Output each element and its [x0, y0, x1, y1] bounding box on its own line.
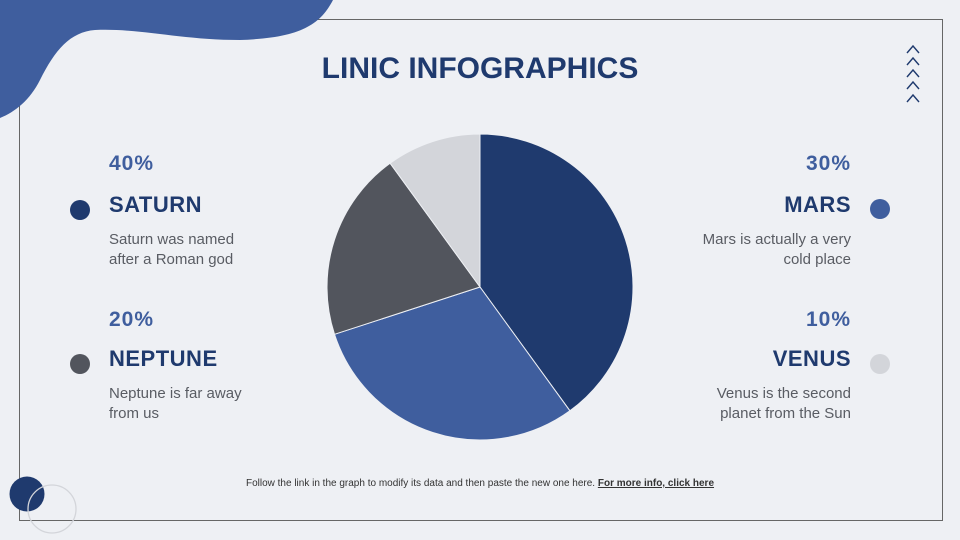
panel: neptune: NEPTUNE [109, 346, 218, 371]
panel: neptune: Neptune is far away from us [109, 385, 242, 422]
panel: venus: Venus is the second planet from the Sun [717, 385, 851, 422]
panel: neptune [70, 308, 242, 422]
icon: chevrons [906, 45, 920, 102]
panel: venus: VENUS [773, 346, 851, 371]
panel: saturn: SATURN [109, 192, 202, 217]
blob top-left [0, 0, 333, 118]
panel: venus: 10% [806, 308, 851, 331]
panel: saturn: 40% [109, 152, 154, 175]
footer note: Follow the link in the graph to modify its data and then paste the new one here. For more info, click here [246, 478, 714, 489]
panel: mars [703, 152, 890, 268]
panel: venus [716, 308, 890, 422]
panel: saturn: Saturn was named after a Roman god [109, 231, 234, 268]
panel: mars: Mars is actually a very cold place [703, 231, 851, 268]
panel: mars: 30% [806, 152, 851, 175]
panel: saturn [70, 152, 234, 268]
title: LINIC INFOGRAPHICS [322, 52, 638, 85]
panel: neptune: 20% [109, 308, 154, 331]
panel: mars: MARS [784, 192, 851, 217]
decorative circles [10, 476, 44, 512]
